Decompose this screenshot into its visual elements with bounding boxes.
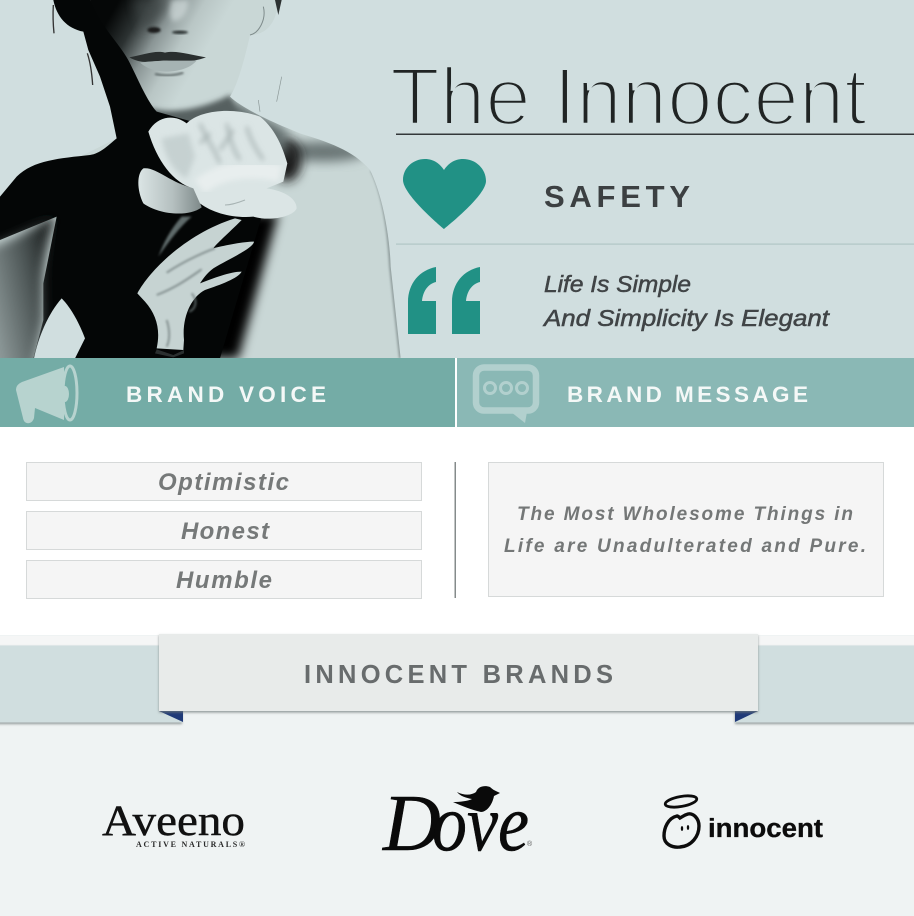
lips <box>129 52 206 62</box>
title: The Innocent <box>390 52 867 142</box>
wisps of hair <box>53 5 93 85</box>
icon: dove bird <box>453 786 500 812</box>
logo: innocent: innocent <box>708 815 824 843</box>
motto: Life Is Simple <box>544 271 691 297</box>
panel: white content background <box>0 427 914 635</box>
flower <box>138 168 202 214</box>
label: brand message: BRAND MESSAGE <box>567 382 808 407</box>
ribbon fold right <box>735 711 758 722</box>
brand voice list <box>26 462 422 598</box>
icon: quote marks <box>408 267 480 334</box>
gap between arm and torso <box>34 298 85 358</box>
left arm <box>0 216 56 358</box>
skin <box>84 130 398 358</box>
panel: brand voice bar <box>0 358 455 427</box>
logo: aveeno: Aveeno <box>102 798 245 845</box>
hand <box>137 218 254 350</box>
motto: And Simplicity Is Elegant <box>542 305 831 331</box>
icon: chat bubble <box>476 368 536 423</box>
panel: brand message bar <box>457 358 914 427</box>
ribbon fold left <box>159 711 183 722</box>
heading: safety: SAFETY <box>544 179 690 214</box>
logo: dove: ® <box>527 840 533 848</box>
item: honest <box>26 512 422 550</box>
banner: innocent brands <box>159 634 758 711</box>
label: brand voice: BRAND VOICE <box>126 382 326 407</box>
nose <box>133 0 167 30</box>
title rule <box>396 134 914 135</box>
brand message box <box>488 462 884 596</box>
item: humble <box>26 560 422 598</box>
divider <box>454 462 456 598</box>
logo: dove: ove <box>432 780 529 868</box>
item: humble: Humble <box>176 567 272 594</box>
portrait of woman with flower <box>0 0 401 373</box>
icon: heart <box>403 159 486 229</box>
item: optimistic <box>26 462 422 500</box>
panel: innocent brands background <box>0 635 914 916</box>
ear <box>250 7 264 35</box>
item: optimistic: Optimistic <box>158 469 289 496</box>
skin shading <box>90 0 401 358</box>
logo: innocent <box>664 794 824 847</box>
brand message box: Life are Unadulterated and Pure. <box>504 536 866 557</box>
logo: dove <box>382 780 533 868</box>
icon: smiling face <box>664 814 699 847</box>
section rule <box>396 244 914 245</box>
banner: innocent brands: INNOCENT BRANDS <box>304 661 613 689</box>
black shadow <box>0 0 262 358</box>
icon: megaphone <box>16 366 77 423</box>
background: top panel <box>0 0 914 358</box>
icon: halo <box>664 794 698 809</box>
item: honest: Honest <box>181 518 270 545</box>
brand message box: The Most Wholesome Things in <box>517 504 853 525</box>
logo: dove: D <box>382 780 441 868</box>
logo: aveeno: ACTIVE NATURALS® <box>136 840 245 849</box>
motto <box>542 271 831 331</box>
